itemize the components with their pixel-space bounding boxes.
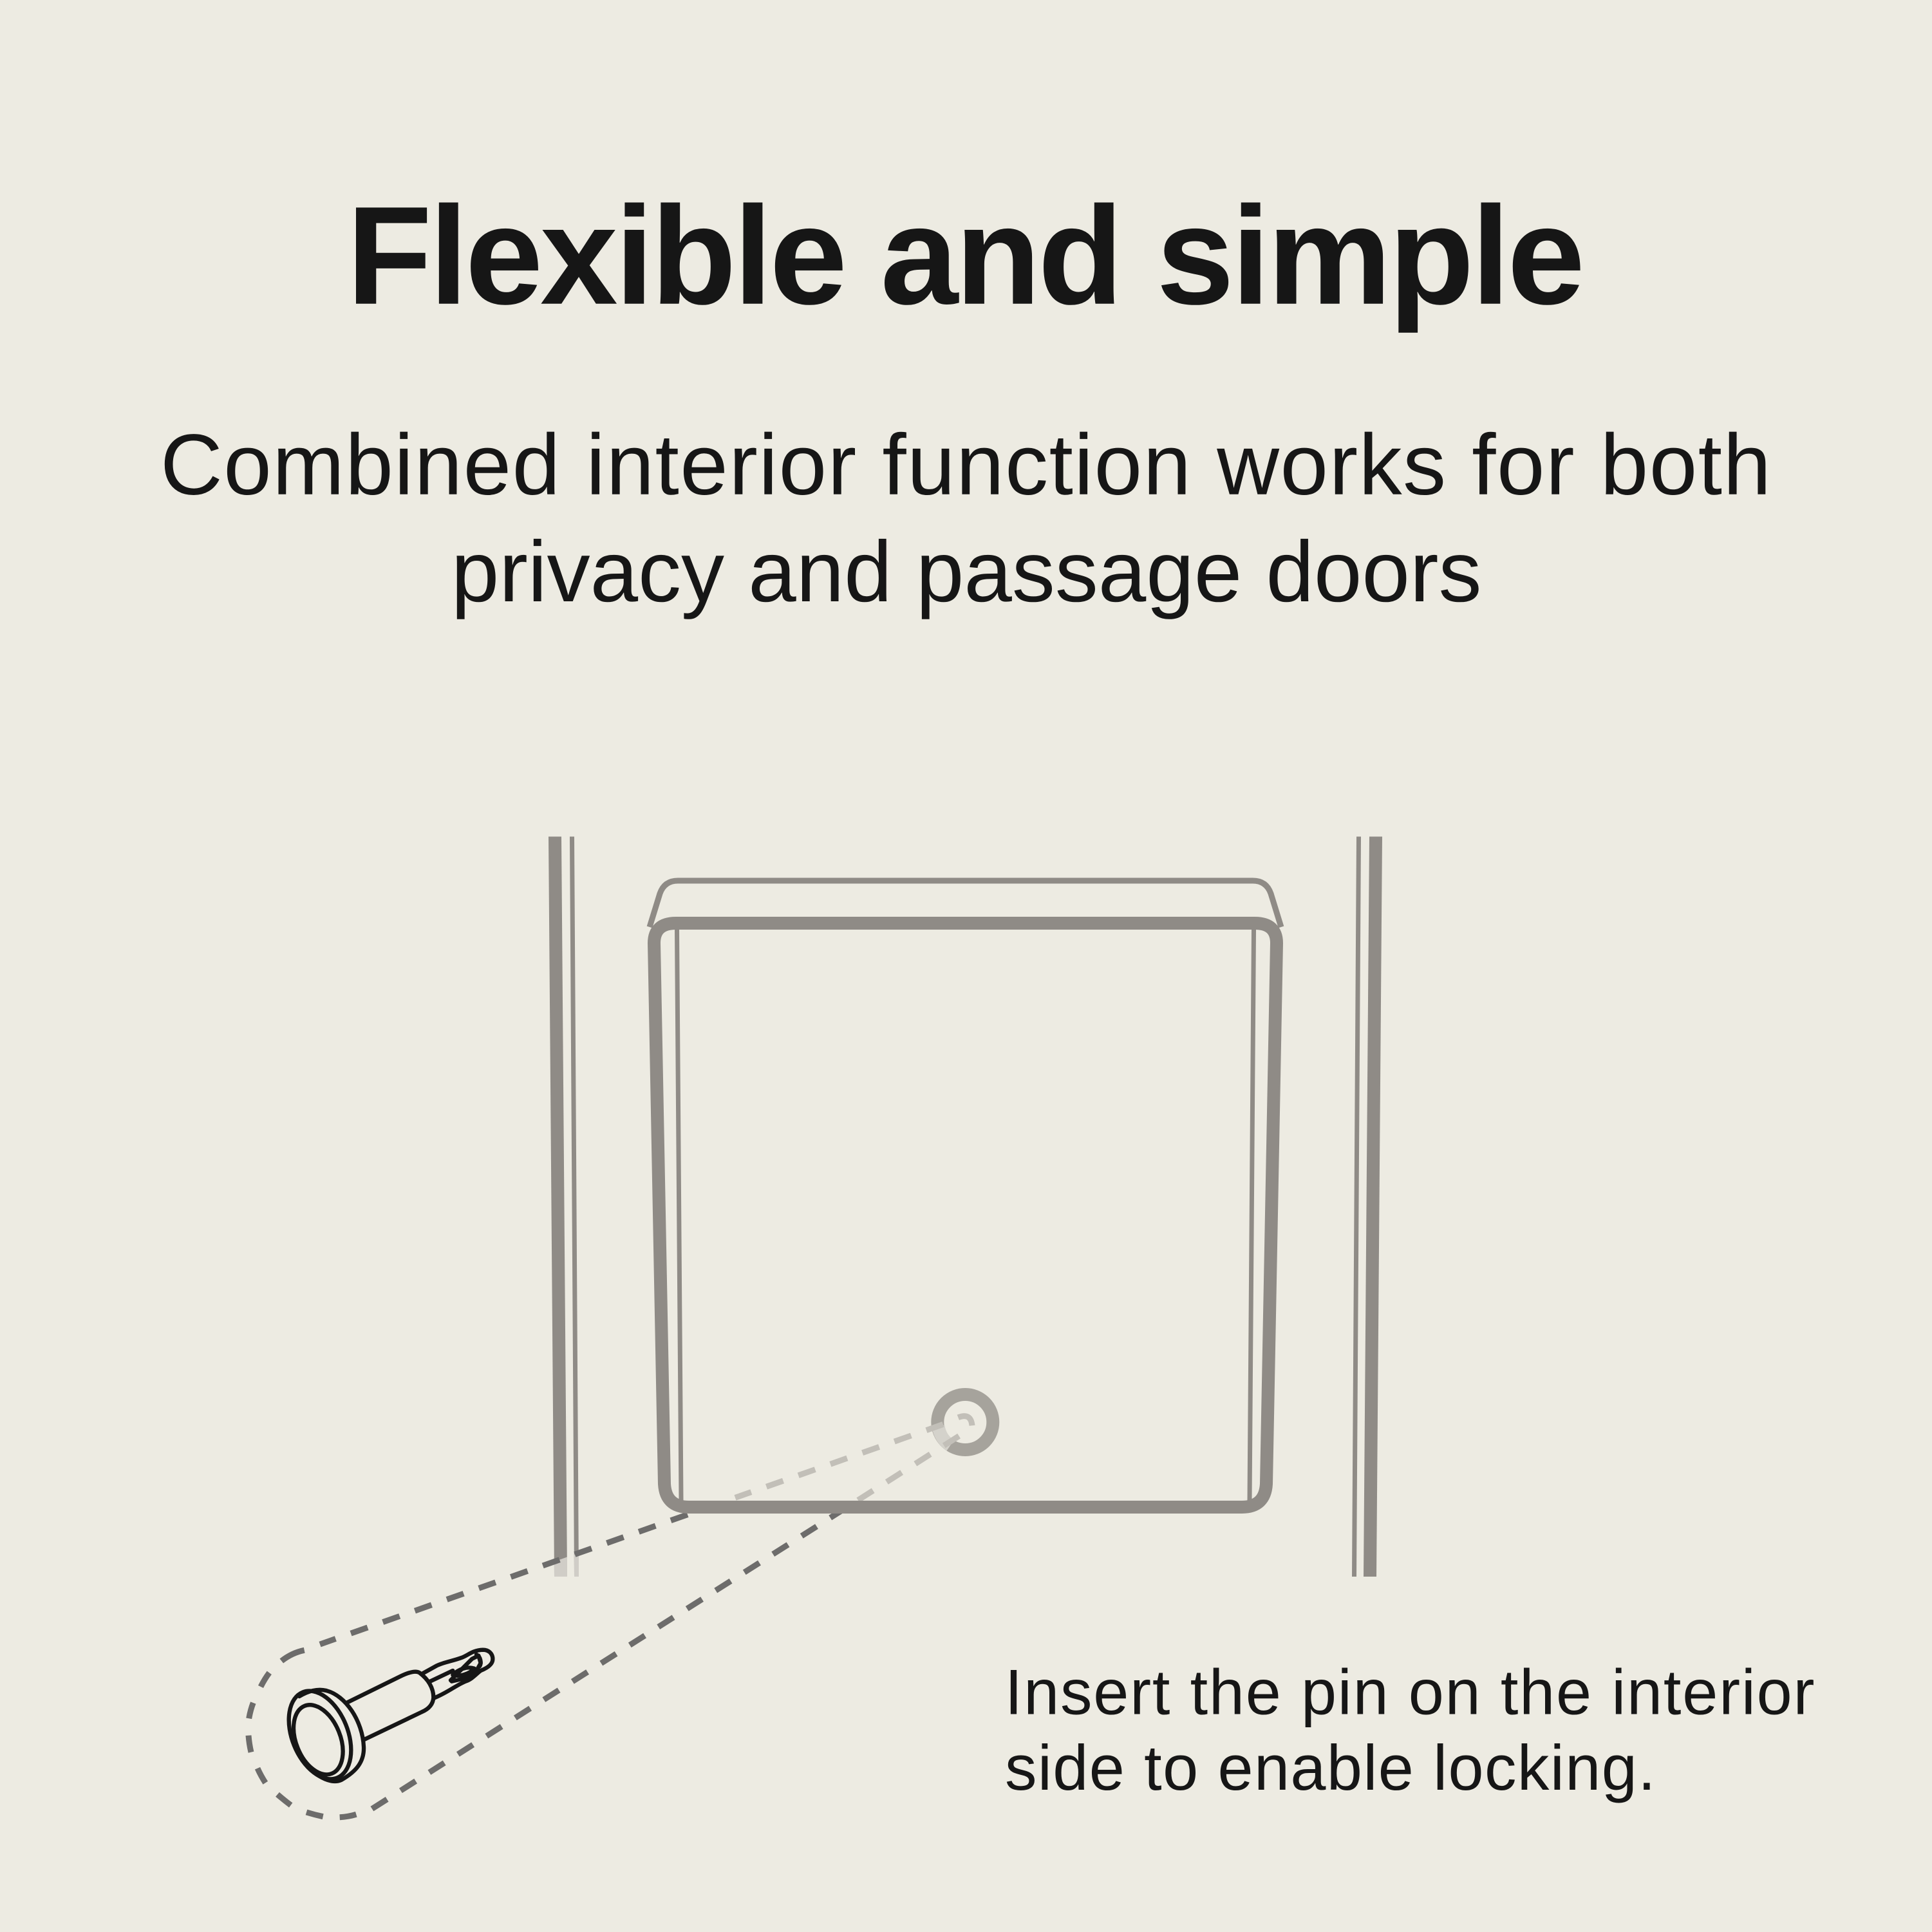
- subtitle: Combined interior function works for both: [160, 417, 1771, 513]
- caption: Insert the pin on the interior: [1005, 1656, 1814, 1728]
- caption: [1005, 1656, 1814, 1803]
- caption: side to enable locking.: [1005, 1732, 1656, 1803]
- dashed callout lines inside door: [735, 1416, 972, 1505]
- title: Flexible and simple: [346, 178, 1585, 333]
- right door jamb: [1352, 837, 1382, 1577]
- icon: locking pin: [277, 1650, 492, 1788]
- subtitle: privacy and passage doors: [451, 524, 1481, 620]
- dashed callout lines outside door: [249, 1508, 845, 1817]
- subtitle: [160, 417, 1771, 620]
- door diagram: [249, 837, 1382, 1817]
- left door jamb: [549, 837, 579, 1577]
- pin hole ring: [937, 1394, 993, 1450]
- door: [650, 881, 1281, 1507]
